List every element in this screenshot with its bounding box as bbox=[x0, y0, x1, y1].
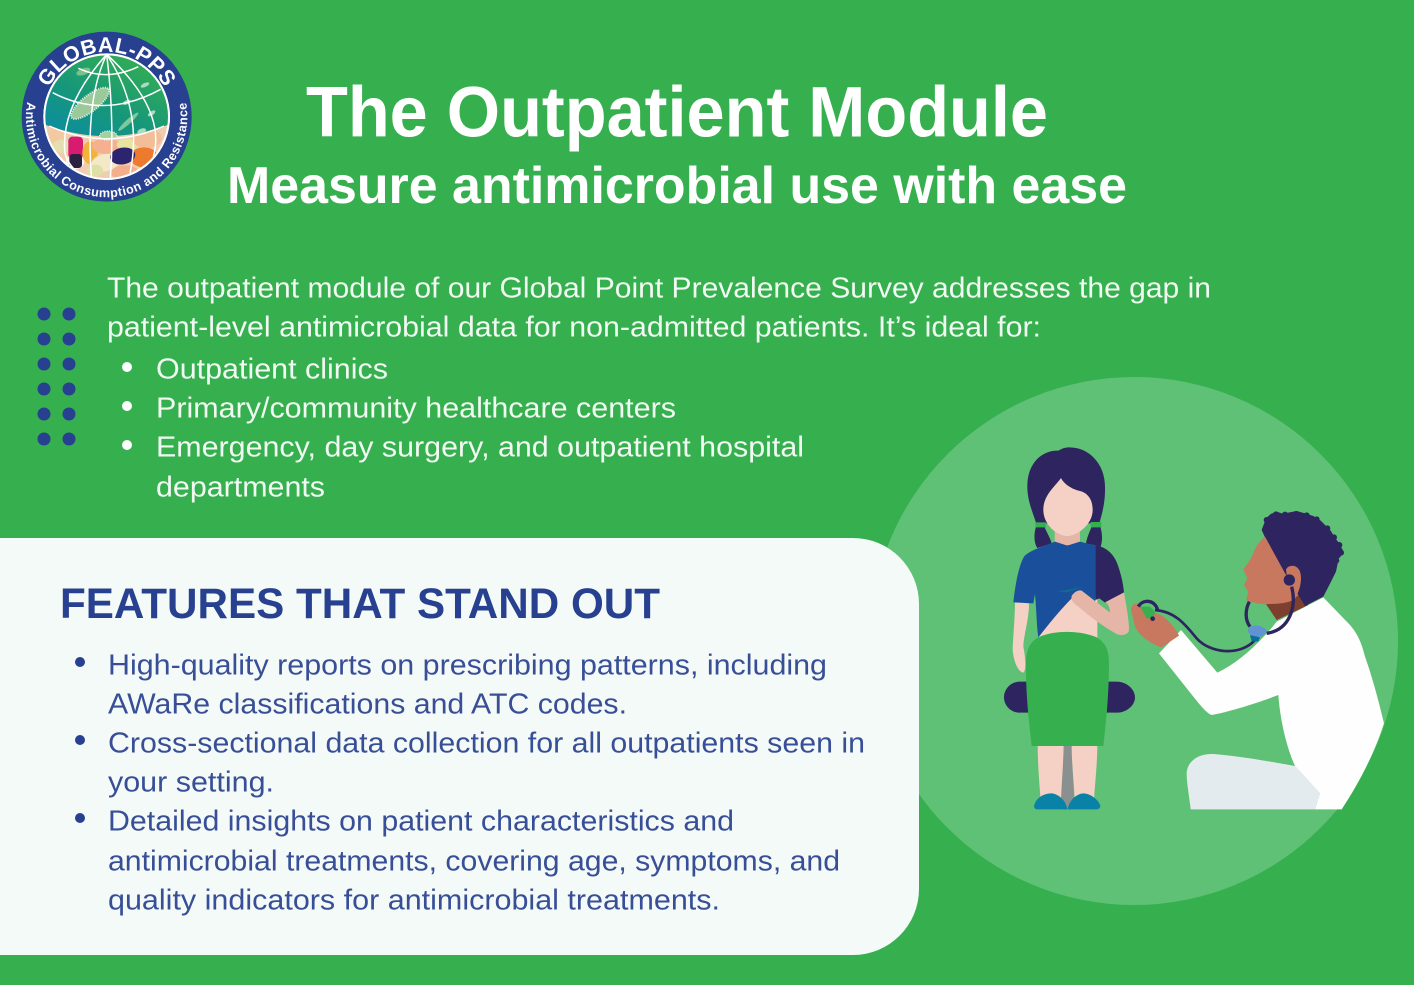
features panel bbox=[0, 538, 919, 955]
hair ties bbox=[1035, 522, 1101, 527]
features list: High-quality reports on prescribing patterns, including bbox=[108, 650, 827, 682]
pills background bbox=[46, 125, 168, 178]
features heading: FEATURES THAT STAND OUT bbox=[60, 580, 660, 628]
patient bbox=[1004, 447, 1135, 809]
intro text: The outpatient module of our Global Point Prevalence Survey addresses the gap in bbox=[107, 272, 1211, 304]
doctor face bbox=[1243, 537, 1298, 604]
features list bbox=[75, 650, 865, 916]
doctor bbox=[1131, 511, 1384, 809]
features list: Detailed insights on patient characteristics and bbox=[108, 806, 734, 838]
setting list bbox=[122, 354, 804, 504]
doctor neck bbox=[1265, 593, 1308, 620]
right arm bbox=[1071, 590, 1129, 635]
face bbox=[1043, 478, 1093, 536]
logo: Global-PPS bbox=[22, 32, 192, 202]
shoes bbox=[1034, 793, 1100, 809]
shirt folds bbox=[1053, 587, 1090, 600]
stethoscope bbox=[1138, 574, 1295, 651]
logo text: GLOBAL-PPS bbox=[39, 37, 175, 85]
skirt bbox=[1026, 632, 1109, 746]
hair bbox=[1027, 447, 1105, 548]
white pants bbox=[1187, 754, 1320, 809]
left arm bbox=[1013, 602, 1029, 673]
globe upper half bbox=[43, 53, 170, 136]
title: The Outpatient Module bbox=[306, 74, 1048, 152]
setting list: Primary/community healthcare centers bbox=[156, 392, 676, 424]
torso skin bbox=[1037, 597, 1097, 640]
chair stem bbox=[1061, 743, 1075, 809]
intro text bbox=[107, 272, 1211, 344]
features list: Cross-sectional data collection for all outpatients seen in bbox=[108, 728, 865, 760]
features list: quality indicators for antimicrobial treatments. bbox=[108, 884, 720, 916]
chair seat bbox=[1004, 682, 1135, 713]
subtitle: Measure antimicrobial use with ease bbox=[227, 157, 1127, 215]
neck bbox=[1055, 527, 1080, 545]
doctor coat bbox=[1159, 597, 1384, 809]
intro text: patient-level antimicrobial data for non-admitted patients. It’s ideal for: bbox=[107, 312, 1041, 344]
features list: antimicrobial treatments, covering age, symptoms, and bbox=[108, 846, 840, 878]
doctor hand bbox=[1131, 603, 1179, 647]
doctor ear bbox=[1286, 566, 1301, 594]
shirt bbox=[1013, 542, 1095, 637]
globe grid bbox=[49, 54, 164, 183]
illustration background circle bbox=[870, 377, 1398, 905]
bacteria bbox=[70, 86, 110, 120]
setting list: Outpatient clinics bbox=[156, 354, 388, 386]
setting list: departments bbox=[156, 472, 325, 504]
illustration: doctor examining patient bbox=[1004, 447, 1384, 809]
doctor hair bbox=[1262, 511, 1344, 606]
legs bbox=[1038, 745, 1097, 800]
features list: AWaRe classifications and ATC codes. bbox=[108, 688, 627, 720]
shirt sleeve dark bbox=[1095, 545, 1124, 603]
setting list: Emergency, day surgery, and outpatient hospital bbox=[156, 432, 804, 464]
logo: Global-PPS: Antimicrobial Consumption and Resistance bbox=[26, 102, 188, 200]
decorative dot grid bbox=[38, 308, 76, 446]
features list: your setting. bbox=[108, 766, 274, 798]
